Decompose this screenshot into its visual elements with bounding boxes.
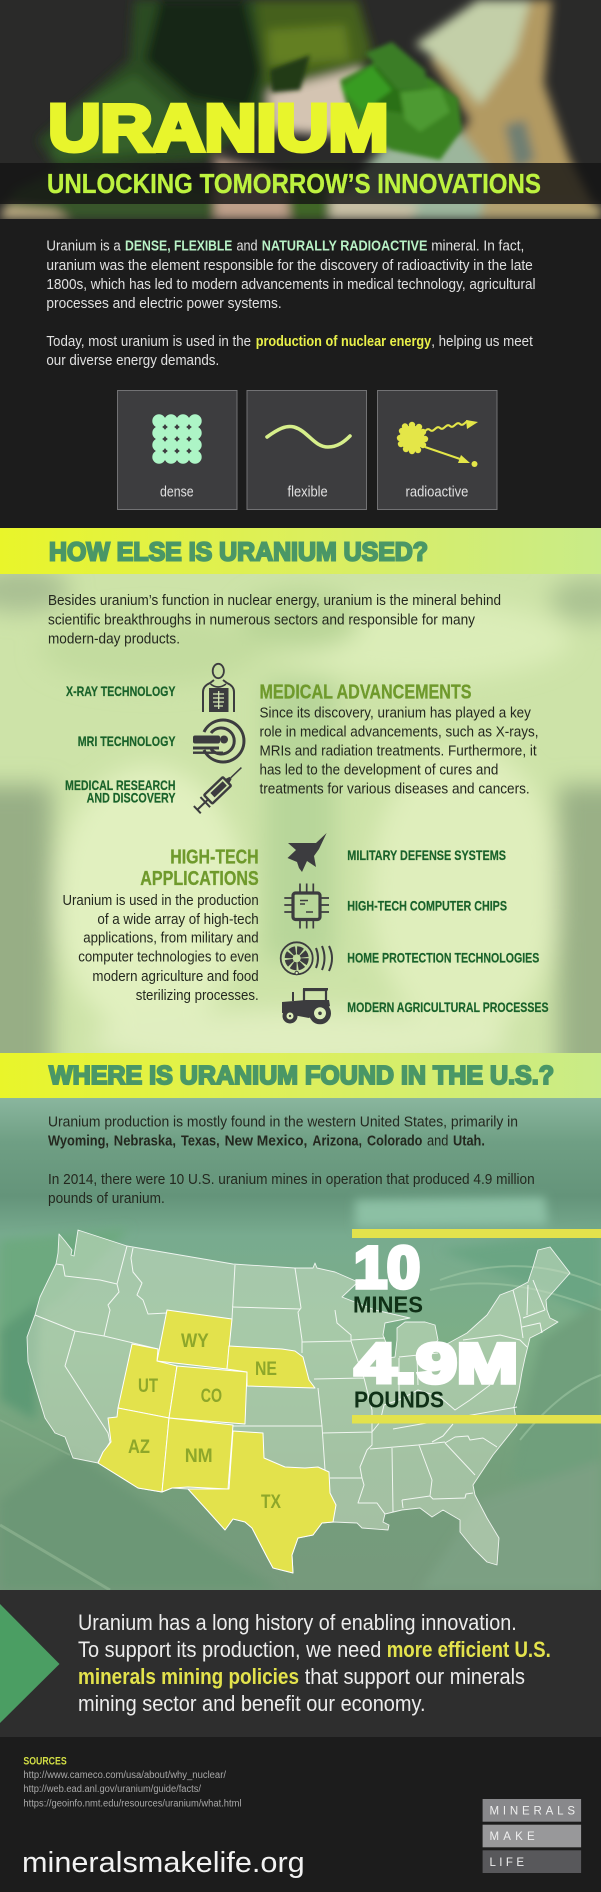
text block: policy message: mining sector and benefit our economy. [78, 1691, 426, 1716]
panel: how else is uranium used [0, 528, 601, 1085]
map: highlighted state Texas [188, 1431, 336, 1573]
map: lower 48 outline [27, 1230, 570, 1573]
label: flexible: flexible [288, 485, 328, 501]
icon: mri scanner [193, 720, 244, 762]
text block: high-tech applications: computer technologies to even [78, 950, 259, 966]
website url: mineralsmakelife.org [22, 1847, 305, 1879]
text block: medical advancements: role in medical advancements, such as X-rays, [260, 725, 538, 741]
panel: hero with uranium mineral photo [0, 0, 601, 219]
icon: syringe [192, 763, 246, 815]
text block: high-tech applications: applications, from military and [83, 931, 259, 947]
text block: uranium introduction: NATURALLY RADIOACTIVE [262, 239, 428, 255]
panel: call to action [0, 1590, 601, 1737]
label: UT: UT [138, 1376, 158, 1397]
icon: computer chip [284, 884, 329, 928]
panel: footer [0, 1737, 601, 1892]
icon: dense atom grid [152, 414, 202, 464]
label: medical research: MEDICAL RESEARCH [65, 777, 176, 793]
panel: where is uranium found [0, 1053, 601, 1590]
section heading: WHERE IS URANIUM FOUND IN THE U.S.? [49, 1062, 554, 1090]
label: mri technology: MRI TECHNOLOGY [78, 733, 176, 749]
text block: production states: Wyoming, [48, 1134, 109, 1150]
heading: medical advancements: MEDICAL ADVANCEMENTS [260, 681, 472, 703]
text block: policy message: To support its production, we need [78, 1637, 381, 1662]
text block: medical advancements: Since its discovery, uranium has played a key [260, 706, 532, 722]
sources list: http://web.ead.anl.gov/uranium/guide/facts/ [23, 1784, 201, 1795]
text block: section intro: scientific breakthroughs in numerous sectors and responsible for many [48, 612, 476, 628]
aerial mine background [0, 1098, 601, 1590]
icon: radioactive decay [397, 420, 478, 467]
sources list [23, 1770, 242, 1810]
text block: medical advancements [260, 706, 538, 798]
label: WY: WY [181, 1331, 209, 1352]
map: highlighted state Utah [118, 1344, 177, 1418]
logo: minerals make life: MINERALS [490, 1805, 575, 1817]
text block: policy message: more efficient U.S. [387, 1637, 551, 1662]
text block: production states: Texas, [181, 1134, 220, 1150]
icon: smoke alarm [281, 942, 332, 975]
label: military defense: MILITARY DEFENSE SYSTEMS [347, 847, 506, 863]
label: NM: NM [185, 1446, 213, 1467]
stat: 10: 10 [354, 1236, 420, 1301]
sources list: http://www.cameco.com/usa/about/why_nuclear/ [23, 1770, 226, 1781]
map: highlighted state Nebraska [227, 1346, 315, 1388]
text block: production states: Uranium production is mostly found in the western United States, primarily in [48, 1115, 518, 1131]
heading: high-tech applications [140, 846, 259, 890]
text block: section intro [48, 593, 501, 647]
text block: section intro: Besides uranium’s function in nuclear energy, uranium is the mineral behind [48, 593, 501, 609]
logo: minerals make life: MAKE [490, 1831, 535, 1843]
icon: x-ray person [203, 664, 234, 712]
text block: high-tech applications: of a wide array of high-tech [97, 912, 259, 928]
section header bar [0, 1053, 601, 1098]
stat: 4.9M: 4.9M [355, 1332, 518, 1395]
text block: uranium introduction: production of nuclear energy [256, 334, 432, 350]
text block: uranium introduction: Today, most uranium is used in the [46, 334, 251, 350]
label: NE: NE [255, 1359, 277, 1380]
text block: high-tech applications: Uranium is used in the production [62, 893, 259, 909]
text block: production states [48, 1115, 535, 1207]
panel: radioactive [378, 390, 497, 510]
text block: high-tech applications: modern agriculture and food [92, 969, 259, 985]
stat label: pounds: POUNDS [354, 1387, 444, 1413]
logo: minerals make life [483, 1799, 581, 1873]
map: highlighted state Arizona [98, 1408, 169, 1492]
text block: production states: and [427, 1134, 448, 1150]
text block: policy message: minerals mining policies [78, 1664, 299, 1689]
sources heading: SOURCES [23, 1755, 67, 1767]
text block: uranium introduction: our diverse energy demands. [46, 353, 219, 369]
map: highlighted state Colorado [169, 1366, 247, 1424]
text block: production states: Colorado [367, 1134, 422, 1150]
arrow: green pointer [0, 1604, 60, 1723]
label: AZ: AZ [128, 1437, 150, 1458]
text block: production states: New Mexico, [225, 1134, 307, 1150]
text block: medical advancements: MRIs and radiation treatments. Furthermore, it [260, 744, 537, 760]
section heading: HOW ELSE IS URANIUM USED? [49, 539, 428, 567]
map: highlighted state Wyoming [157, 1310, 232, 1369]
subtitle: UNLOCKING TOMORROW’S INNOVATIONS [47, 168, 541, 199]
stat label: mines: MINES [353, 1292, 423, 1318]
text block: policy message: Uranium has a long history of enabling innovation. [78, 1610, 517, 1635]
label: dense: dense [160, 485, 194, 501]
text block: uranium introduction: Uranium is a [46, 239, 121, 255]
translucent title band [0, 163, 601, 204]
title: URANIUM: URANIUM [48, 90, 388, 164]
text block: production states: Nebraska, [114, 1134, 176, 1150]
label: CO: CO [201, 1386, 222, 1407]
text block: policy message: that support our minerals [305, 1664, 525, 1689]
text block: uranium introduction: 1800s, which has led to modern advancements in medical technology, agricultural [46, 277, 536, 293]
icon: flexible curve [267, 426, 350, 447]
text block: uranium introduction: and [236, 239, 258, 255]
text block: section intro: modern-day products. [48, 631, 180, 647]
text block: production states: pounds of uranium. [48, 1191, 165, 1207]
text block: production states: Arizona, [312, 1134, 362, 1150]
panel: flexible [247, 390, 366, 510]
text block: medical advancements: treatments for various diseases and cancers. [260, 782, 530, 798]
text block: production states: Utah. [453, 1134, 485, 1150]
text block: uranium introduction: processes and electric power systems. [46, 296, 282, 312]
text block: production states: In 2014, there were 10 U.S. uranium mines in operation that produced 4.9 million [48, 1172, 535, 1188]
text block: high-tech applications [62, 893, 259, 1004]
text block: high-tech applications: sterilizing processes. [136, 988, 259, 1004]
map of the United States [27, 1230, 570, 1573]
text block: uranium introduction: mineral. In fact, [431, 239, 524, 255]
text block: uranium introduction: , helping us meet [431, 334, 533, 350]
label: medical research [65, 777, 176, 806]
label: radioactive: radioactive [406, 485, 468, 501]
heading: high-tech applications: HIGH-TECH [170, 846, 259, 868]
icon: fighter jet [288, 833, 327, 872]
text block: medical advancements: has led to the development of cures and [260, 763, 498, 779]
panel: dense [118, 390, 237, 510]
sources list: https://geoinfo.nmt.edu/resources/uranium/what.html [23, 1799, 242, 1810]
icon: tractor [282, 988, 330, 1022]
label: home protection: HOME PROTECTION TECHNOLOGIES [347, 950, 539, 966]
text block: uranium introduction [46, 239, 536, 369]
callout: mines and pounds stats [352, 1229, 601, 1424]
heading: high-tech applications: APPLICATIONS [140, 868, 259, 890]
logo: minerals make life: LIFE [490, 1857, 524, 1869]
text block: uranium introduction: DENSE, [125, 239, 171, 255]
section header bar [0, 528, 601, 574]
label: medical research: AND DISCOVERY [87, 790, 176, 806]
map: highlighted state New Mexico [162, 1418, 233, 1492]
label: computer chips: HIGH-TECH COMPUTER CHIPS [347, 898, 507, 914]
map: state borders [35, 1246, 545, 1514]
x-ray background [0, 568, 601, 1085]
text block: policy message [78, 1610, 551, 1716]
text block: uranium introduction: FLEXIBLE [174, 239, 233, 255]
text block: uranium introduction: uranium was the element responsible for the discovery of radioactivity in the late [46, 258, 533, 274]
label: x-ray technology: X-RAY TECHNOLOGY [66, 683, 176, 699]
label: TX: TX [261, 1492, 281, 1513]
